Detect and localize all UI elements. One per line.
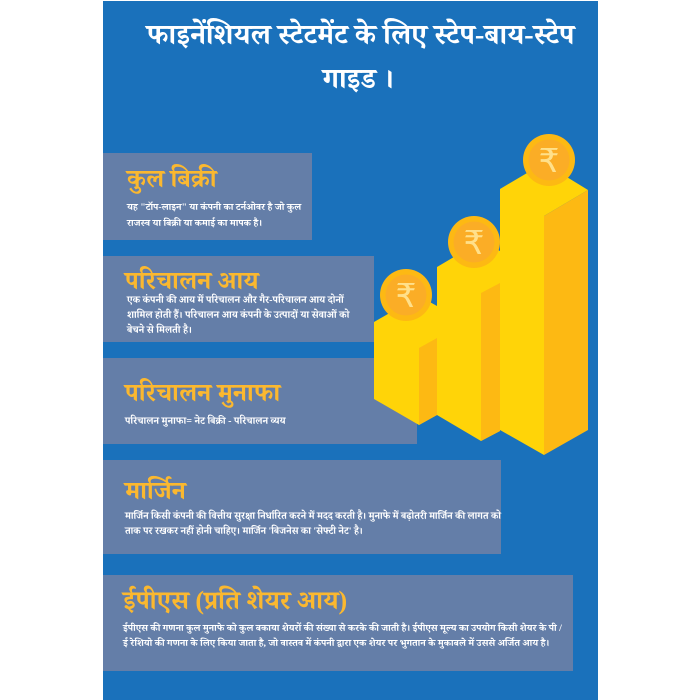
text: margin: मार्जिन किसी कंपनी की वित्तीय सुरक्षा निर्धारित करने में मदद करती है। मुनाफे में बढ़ोतरी मार्जिन की लागत को: [125, 511, 501, 522]
background: [103, 1, 598, 700]
panel: margin: [103, 460, 501, 554]
text: EPS: [122, 622, 562, 649]
panel: total sales: [103, 153, 312, 240]
bar 2: [437, 241, 500, 441]
text: EPS: ई रेशियो की गणना के लिए किया जाता है, जो वास्तव में कंपनी द्वारा एक शेयर पर भुगतान के मुकाबले में उससे अर्जित आय है।: [123, 638, 549, 649]
text: total sales: राजस्व या बिक्री या कमाई का मापक है।: [127, 218, 262, 229]
text: margin: ताक पर रखकर नहीं होनी चाहिए। मार्जिन 'बिजनेस का 'सेफ्टी नेट' है।: [125, 526, 363, 537]
text: operating income: बेचने से मिलती है।: [127, 325, 192, 336]
heading: EPS: ईपीएस (प्रति शेयर आय): [123, 586, 347, 615]
title: फाइनेंशियल स्टेटमेंट के लिए स्टेप-बाय-स्टेप: [147, 20, 574, 51]
panel: EPS: [103, 575, 573, 671]
text: operating income: शामिल होती हैं। परिचालन आय कंपनी के उत्पादों या सेवाओं को: [127, 310, 349, 321]
coin 1: ₹: [396, 276, 416, 315]
text: total sales: [126, 201, 302, 229]
coin 3: ₹: [538, 141, 560, 180]
bar 1: [374, 296, 437, 425]
text: EPS: ईपीएस की गणना कुल मुनाफे को कुल बकाया शेयरों की संख्या से करके की जाती है। ईपीएस मूल्य का उपयोग किसी शेयर के पी /: [123, 623, 562, 634]
text: total sales: यह "टॉप-लाइन" या कंपनी का टर्नओवर है जो कुल: [127, 202, 301, 213]
bar 3: [500, 163, 588, 455]
coin 3: [523, 134, 575, 186]
text: operating income: [126, 293, 350, 336]
heading: operating profit: परिचालन मुनाफा: [125, 378, 280, 407]
heading: operating income: परिचालन आय: [125, 266, 258, 295]
title: [144, 18, 576, 95]
panel: operating income: [103, 256, 374, 342]
text: margin: [124, 509, 502, 537]
panel: operating profit: [103, 358, 417, 444]
text: operating income: एक कंपनी की आय में परिचालन और गैर-परिचालन आय दोनों: [127, 295, 344, 306]
heading: margin: मार्जिन: [125, 476, 186, 505]
coin 2: ₹: [464, 223, 484, 262]
coin 2: [448, 216, 500, 268]
title: गाइड ।: [323, 64, 394, 95]
coin 1: [380, 269, 432, 321]
text: operating profit: परिचालन मुनाफा= नेट बिक्री - परिचालन व्यय: [125, 416, 286, 427]
heading: total sales: कुल बिक्री: [127, 164, 217, 193]
